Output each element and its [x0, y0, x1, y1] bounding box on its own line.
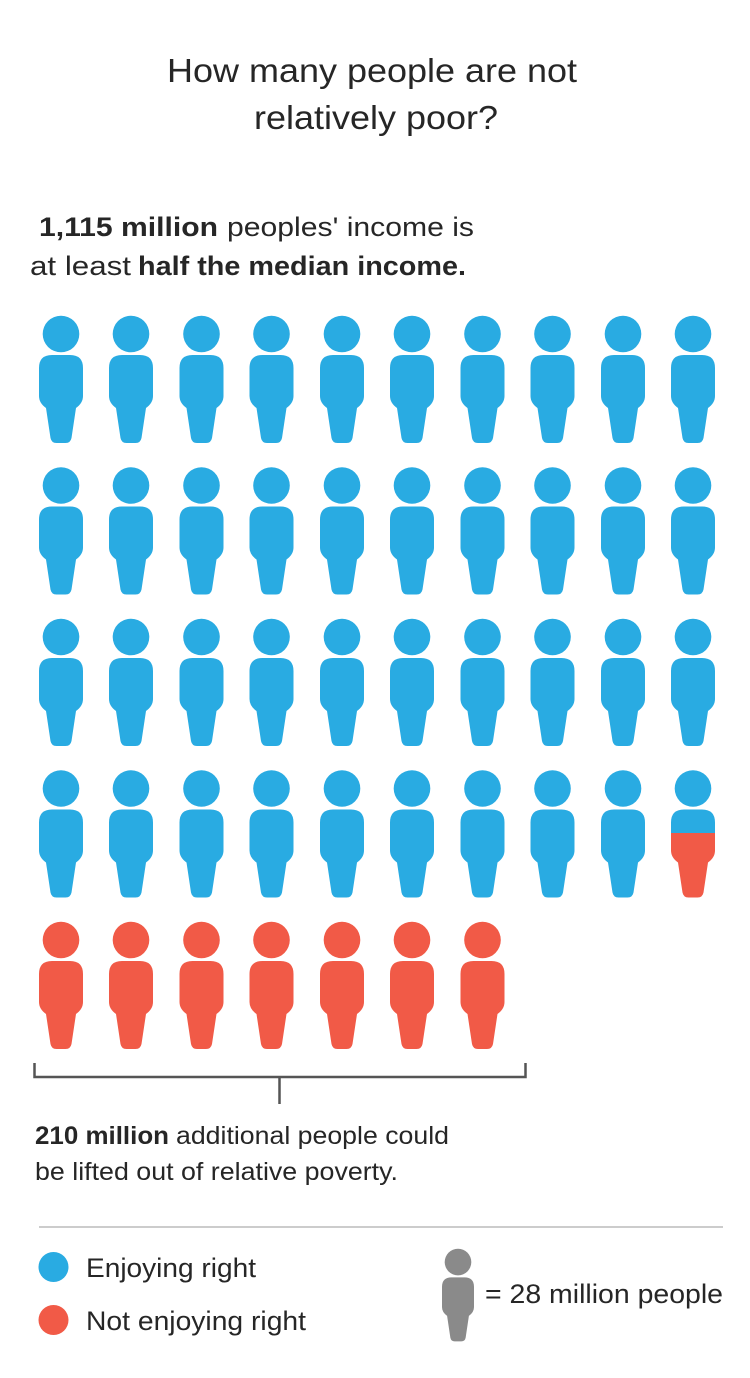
heading: 1,115 million: at least [30, 251, 132, 281]
text: 210 million [35, 1122, 449, 1186]
bracket [34, 1063, 526, 1104]
row 4: blue people [39, 770, 645, 898]
row 1: blue people [39, 316, 715, 443]
title: How many people are not [167, 52, 577, 89]
legend: unit person: = 28 million people [485, 1279, 723, 1309]
legend [38, 1249, 723, 1341]
title: relatively poor? [254, 99, 498, 136]
partially filled person [671, 770, 715, 898]
legend: enjoying right: Enjoying right [86, 1253, 257, 1283]
title [167, 52, 577, 136]
heading: 1,115 million: 1,115 million [39, 212, 218, 242]
heading: 1,115 million: peoples' income is [227, 212, 474, 242]
row 3: blue people [39, 619, 715, 746]
pictogram: people grid [39, 316, 715, 1049]
text: 210 million: additional people could [176, 1122, 449, 1150]
row 2: blue people [39, 467, 715, 594]
text: 210 million: 210 million [35, 1122, 169, 1150]
heading: 1,115 million [30, 212, 474, 281]
row 5: red people [39, 922, 504, 1049]
legend: not enjoying right: Not enjoying right [86, 1306, 307, 1336]
text: 210 million: be lifted out of relative poverty. [35, 1158, 398, 1186]
legend: unit person [442, 1249, 723, 1341]
heading: 1,115 million: half the median income. [138, 251, 466, 281]
